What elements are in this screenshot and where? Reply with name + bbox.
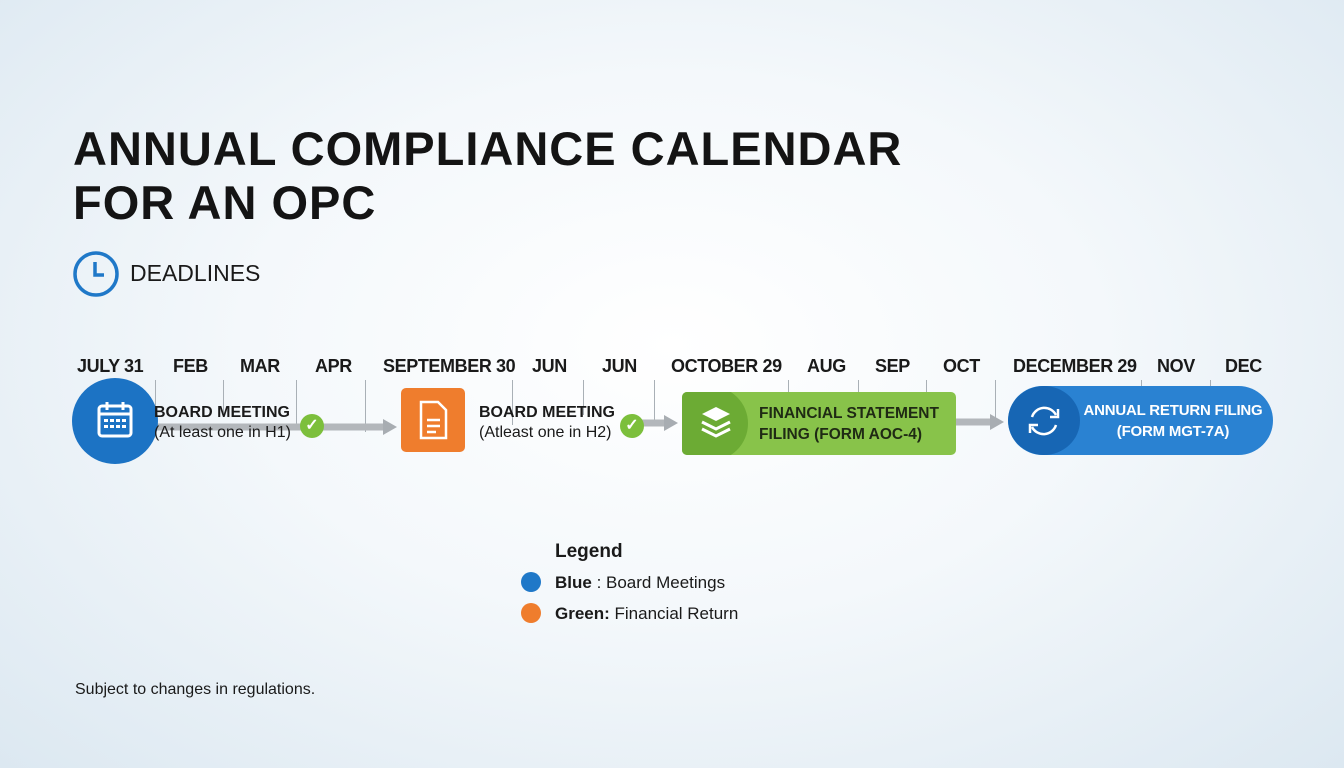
- text: board meeting H1: [154, 404, 291, 441]
- text: MAR: [240, 356, 280, 376]
- text: SEPTEMBER 30: [383, 356, 515, 376]
- text: FEB: [173, 356, 208, 376]
- legend: Green: Financial Return: [555, 604, 738, 623]
- icon: check 2: [620, 414, 644, 438]
- text: JUN: [602, 356, 637, 376]
- title: ANNUAL COMPLIANCE CALENDAR: [73, 122, 902, 175]
- subtitle: deadlines: [73, 251, 260, 297]
- arrows: [157, 414, 1004, 435]
- text: board meeting H1: BOARD MEETING: [154, 404, 290, 421]
- text: SEP: [875, 356, 910, 376]
- icon: check 1: [300, 414, 324, 438]
- text: DECEMBER 29: [1013, 356, 1137, 376]
- panel: annual return: [1008, 386, 1273, 455]
- icon: calendar circle: [72, 378, 158, 464]
- panel: annual return: ANNUAL RETURN FILING: [1083, 402, 1263, 419]
- text: board meeting H2: [479, 404, 615, 441]
- icon: check 2: ✓: [625, 417, 639, 434]
- panel: annual return: (FORM MGT-7A): [1117, 423, 1229, 440]
- panel: financial statement: FILING (FORM AOC-4): [759, 426, 922, 443]
- text: APR: [315, 356, 352, 376]
- panel: financial statement: [682, 392, 956, 455]
- text: NOV: [1157, 356, 1195, 376]
- timeline: [155, 380, 1211, 435]
- icon: check 1: ✓: [305, 417, 319, 434]
- legend: [521, 541, 738, 623]
- text: board meeting H1: (At least one in H1): [154, 424, 291, 441]
- text: JUN: [532, 356, 567, 376]
- panel: financial statement: FINANCIAL STATEMENT: [759, 405, 939, 422]
- footnote: Subject to changes in regulations.: [75, 681, 315, 698]
- icon: clock: [73, 251, 119, 297]
- text: board meeting H2: (Atleast one in H2): [479, 424, 612, 441]
- month labels: JULY 31: [77, 356, 143, 376]
- text: DEC: [1225, 356, 1262, 376]
- text: OCTOBER 29: [671, 356, 782, 376]
- legend: Blue : Board Meetings: [555, 573, 725, 592]
- title: [73, 122, 902, 229]
- subtitle: deadlines: DEADLINES: [130, 260, 260, 286]
- icon: document: [401, 388, 465, 452]
- title: FOR AN OPC: [73, 176, 376, 229]
- text: board meeting H2: BOARD MEETING: [479, 404, 615, 421]
- legend: Legend: [555, 541, 623, 562]
- text: OCT: [943, 356, 980, 376]
- text: AUG: [807, 356, 846, 376]
